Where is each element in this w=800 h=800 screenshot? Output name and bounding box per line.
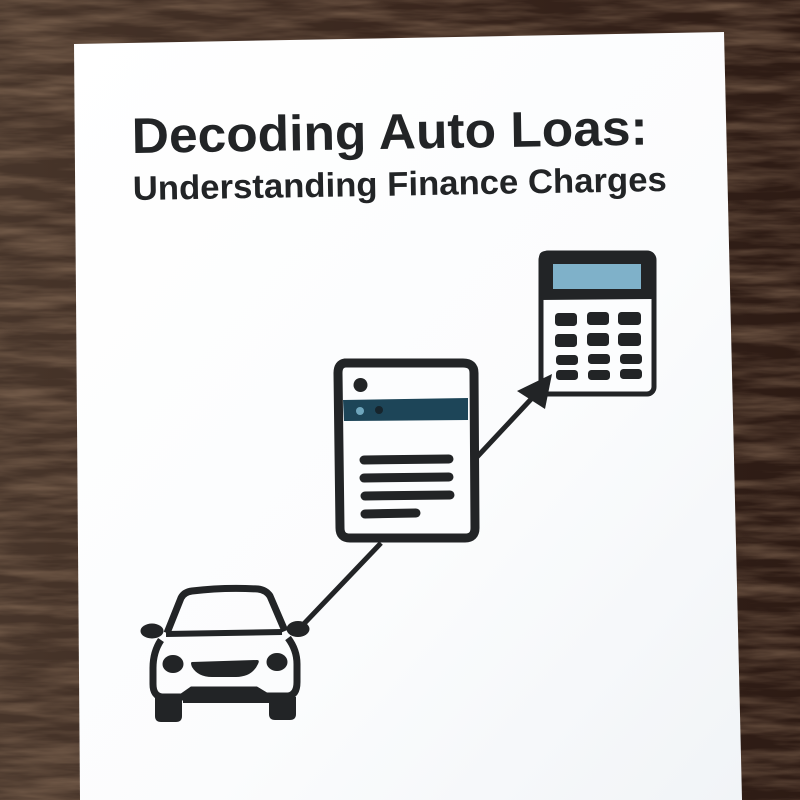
- calculator screen: [553, 264, 641, 289]
- document text lines: [364, 459, 450, 514]
- icon: document: [338, 363, 475, 538]
- icon: car: [140, 588, 310, 722]
- car bumper: [183, 687, 270, 703]
- title: Decoding Auto Loas:: [131, 100, 648, 164]
- icon: calculator: [539, 251, 655, 394]
- calculator header: [539, 251, 655, 300]
- band dots: [356, 406, 383, 415]
- document band: [343, 398, 468, 421]
- calculator body: [541, 253, 654, 394]
- car mirrors: [140, 621, 310, 638]
- car windshield: [167, 588, 285, 633]
- arrow: car to document: [298, 543, 381, 630]
- car hood line: [166, 632, 282, 634]
- subtitle: Understanding Finance Charges: [132, 161, 667, 208]
- car grille: [191, 660, 259, 677]
- car wheels: [155, 697, 296, 722]
- car body: [153, 638, 297, 697]
- document outline: [338, 363, 475, 538]
- arrow: document to calculator: [477, 374, 552, 457]
- document dot: [354, 378, 368, 392]
- car headlights: [162, 653, 288, 673]
- calculator keys: [555, 312, 642, 380]
